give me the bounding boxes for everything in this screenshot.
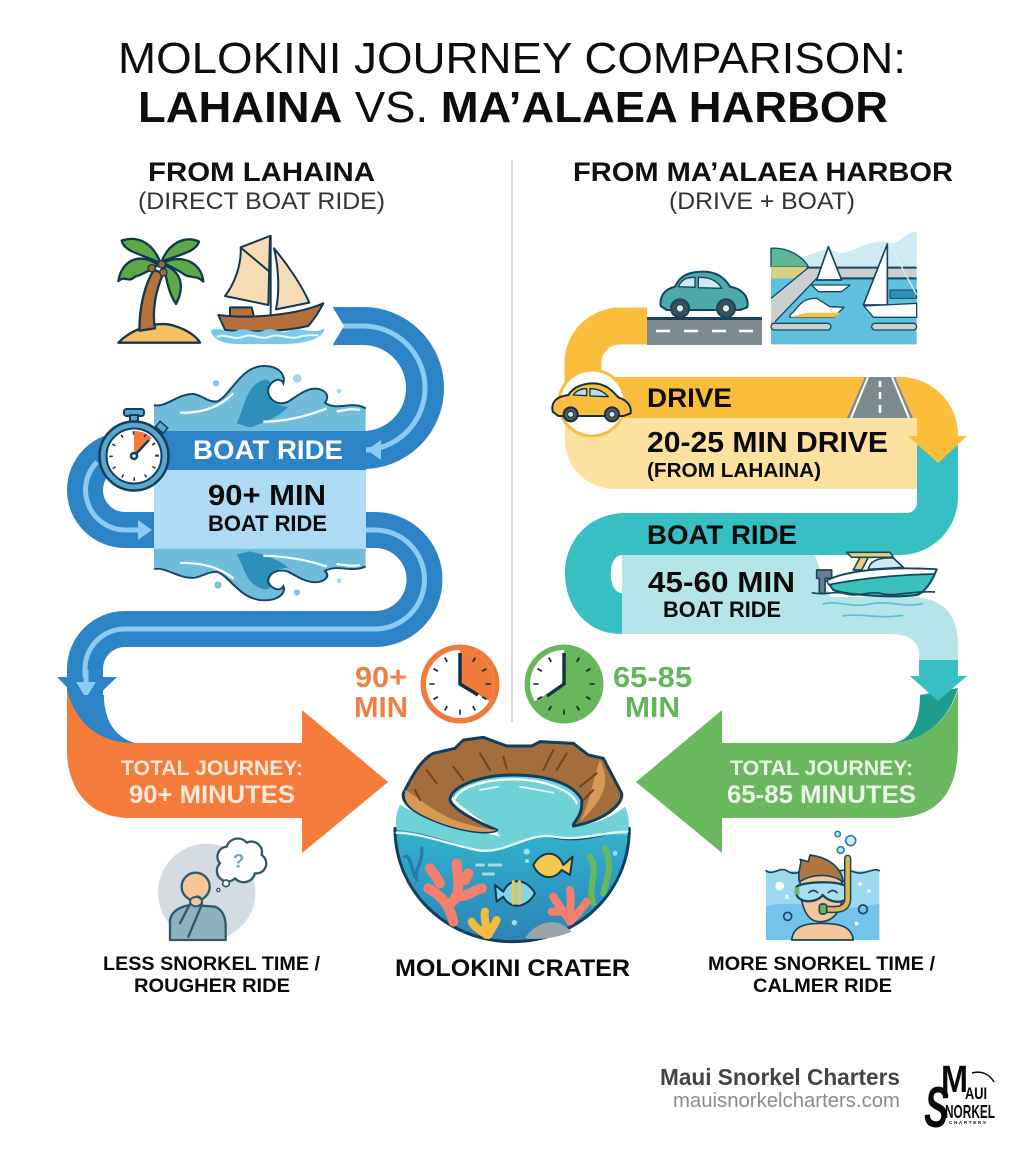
- caption: more snorkel time: MORE SNORKEL TIME /: [708, 953, 936, 975]
- arrow: total journey green: [636, 660, 967, 853]
- duration: 20-25 min drive: 20-25 MIN DRIVE: [647, 427, 888, 459]
- right route: drive section: [559, 317, 958, 489]
- route segment: top curve into boat ride: [154, 326, 425, 450]
- footer brand text: mauisnorkelcharters.com: [673, 1090, 900, 1112]
- text: total journey lahaina: TOTAL JOURNEY:: [121, 757, 303, 780]
- icon: yellow car: [552, 383, 631, 421]
- icon: teal car on road: [661, 272, 748, 317]
- caption: less snorkel time: [103, 953, 321, 997]
- yellow connector from road: [583, 326, 647, 400]
- text: 90+ minutes: 90+ MINUTES: [129, 781, 295, 809]
- heading: from Ma'alaea Harbor: FROM MA’ALAEA HARBOR: [573, 157, 953, 187]
- crater rim rock: [403, 737, 622, 832]
- label: drive: DRIVE: [647, 383, 732, 413]
- route arrowheads: [138, 440, 381, 540]
- label: molokini crater: MOLOKINI CRATER: [395, 955, 630, 982]
- label: boat ride: BOAT RIDE: [647, 520, 797, 550]
- caption: less snorkel time: ROUGHER RIDE: [134, 975, 290, 997]
- light aqua boat panel: [622, 555, 958, 662]
- underwater bowl: [395, 828, 629, 942]
- boat ride header band: [154, 431, 366, 470]
- light body: [154, 470, 366, 548]
- logo: Maui Snorkel Charters: NORKEL: [945, 1102, 995, 1122]
- callout: 65-85 min: MIN: [625, 692, 680, 724]
- duration: 45-60 min: 45-60 MIN: [648, 567, 795, 599]
- caption: less snorkel time: LESS SNORKEL TIME /: [103, 953, 321, 975]
- icon: happy snorkeler: [766, 831, 879, 940]
- road: perspective: [847, 377, 913, 418]
- route segment: left loop: [85, 450, 180, 530]
- callout: 65-85 min: 65-85: [613, 662, 692, 694]
- icon: harbor scene: [771, 232, 917, 344]
- heading: from Ma'alaea Harbor: (DRIVE + BOAT): [669, 188, 855, 215]
- arrow: total journey orange: [67, 690, 388, 853]
- rock: [525, 922, 572, 939]
- wave band bottom: [154, 548, 366, 600]
- route centerlines: [85, 326, 425, 685]
- heading: from Lahaina: FROM LAHAINA: [148, 157, 375, 187]
- callout: 90+ min: 90+: [355, 662, 407, 694]
- lagoon: [452, 775, 581, 837]
- coral yellow: [472, 912, 497, 935]
- icon: palm tree on island: [118, 239, 203, 343]
- text: total journey harbor: TOTAL JOURNEY:: [730, 757, 913, 780]
- yellow arrowhead: [908, 436, 967, 463]
- wave band top: [154, 366, 366, 431]
- title: MOLOKINI JOURNEY COMPARISON:: [118, 34, 906, 83]
- icon: confused person: [158, 839, 266, 941]
- left route: blue path: [85, 326, 425, 700]
- divider: [511, 160, 513, 722]
- yellow fish: [533, 854, 573, 877]
- caption: more snorkel time: CALMER RIDE: [753, 975, 892, 997]
- text: 65-85 minutes: 65-85 MINUTES: [727, 781, 916, 809]
- logo: Maui Snorkel Charters: M: [941, 1059, 968, 1101]
- icon: stopwatch: [100, 409, 168, 490]
- blue down arrow: [57, 670, 117, 707]
- logo: Maui Snorkel Charters: AUI: [965, 1084, 987, 1103]
- caption: more snorkel time: [708, 953, 936, 997]
- surface water: [396, 805, 629, 850]
- icon: sailboat: [211, 235, 325, 344]
- icon: speedboat: [812, 552, 937, 617]
- coral red right: [552, 890, 587, 922]
- duration: 90+ min: 90+ MIN: [208, 480, 326, 512]
- icon: green clock: [524, 644, 604, 724]
- footer brand text: [660, 1064, 900, 1112]
- teal band: [565, 445, 958, 634]
- icon: molokini crater: [395, 737, 629, 942]
- title: [118, 34, 906, 132]
- callout: 90+ min: MIN: [354, 692, 408, 724]
- blue fish: [495, 881, 535, 906]
- label: boat ride: BOAT RIDE: [193, 435, 343, 465]
- icon: orange clock: [420, 644, 500, 724]
- start notch: [328, 306, 344, 346]
- icon: confused person: ?: [233, 851, 244, 872]
- circle: car badge: [559, 370, 625, 436]
- logo: Maui Snorkel Charters: CHARTERS: [949, 1120, 986, 1125]
- title: LAHAINA VS. MA’ALAEA HARBOR: [138, 83, 888, 132]
- yellow drive band: [600, 377, 958, 445]
- heading: from Ma'alaea Harbor: [573, 157, 953, 215]
- coral red left: [428, 863, 482, 922]
- heading: from Lahaina: [138, 157, 385, 215]
- label: boat ride black: BOAT RIDE: [208, 511, 327, 536]
- light yellow drive panel: [565, 400, 917, 489]
- seaweed: [590, 848, 609, 903]
- road: horizontal: [647, 317, 762, 345]
- heading: from Lahaina: (DIRECT BOAT RIDE): [138, 188, 385, 215]
- label: boat ride black: BOAT RIDE: [663, 597, 781, 622]
- logo: Maui Snorkel Charters: S: [920, 1074, 953, 1141]
- callout: 90+ min: [354, 662, 408, 724]
- right route: boat section: [565, 436, 967, 662]
- callout: 65-85 min: [613, 662, 692, 724]
- logo: Maui Snorkel Charters: [920, 1059, 995, 1141]
- footer brand text: Maui Snorkel Charters: [660, 1064, 900, 1090]
- label: from lahaina: (FROM LAHAINA): [647, 460, 821, 482]
- route segment: lower s-curve: [85, 530, 425, 700]
- boat ride card: lahaina: [154, 366, 366, 600]
